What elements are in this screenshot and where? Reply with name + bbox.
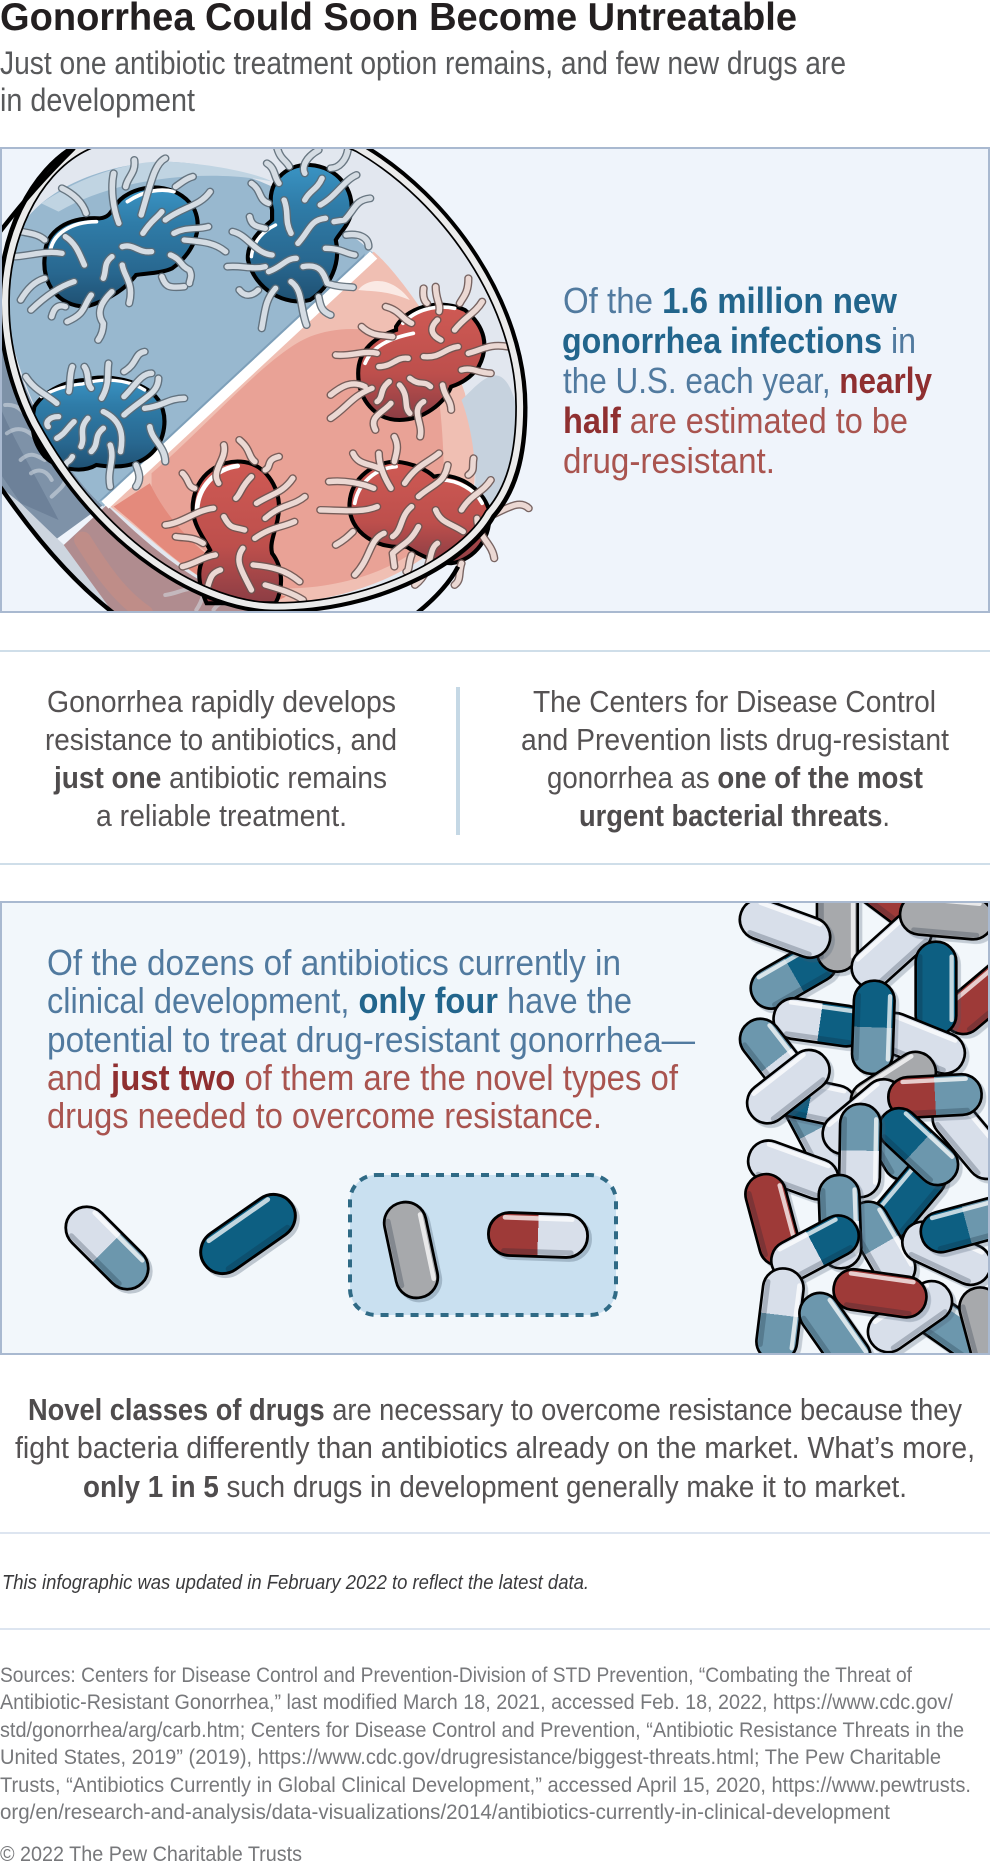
ghost bacteria under glass [5,405,234,610]
text block: novel classes: only 1 in 5 such drugs in development generally make it to market. [83,1469,907,1504]
update note: This infographic was updated in February 2022 to reflect the latest data. [2,1572,589,1594]
text block: CDC threat: and Prevention lists drug-resistant [521,722,949,757]
divider line [0,863,990,865]
sources [0,1664,971,1824]
sources: Sources: Centers for Disease Control and Prevention-Division of STD Prevention, “Combating the Threat of [0,1664,912,1687]
illustration: petri dish with bacteria [0,119,529,613]
bacterium: red, upper right [331,278,508,437]
panel: drug-resistant infections [0,119,989,613]
callout: infection statistics: drug-resistant. [563,440,775,481]
bacterium: red, bottom centre [165,440,305,603]
dish glass [5,123,520,607]
pill: red and white novel [488,1212,588,1258]
divider line [0,1532,990,1534]
subtitle: Just one antibiotic treatment option remains, and few new drugs are [0,45,846,81]
bacterium: blue, lower left [26,352,184,487]
agar: blue half [5,161,374,507]
illustration: pile of pills [738,903,988,1353]
right side tint [462,376,516,505]
text block: CDC threat: The Centers for Disease Control [533,684,936,719]
vertical divider [456,687,460,835]
callout: infection statistics: Of the 1.6 million new [563,280,898,321]
dish lower-left glass side [2,350,320,611]
sources: Antibiotic-Resistant Gonorrhea,” last modified March 18, 2021, accessed Feb. 18, 2022, https://www.cdc.gov/ [0,1691,953,1714]
callout: infection statistics: half are estimated to be [563,400,908,441]
callout: infection statistics [562,280,932,481]
text block: pipeline: and just two of them are the novel types of [47,1057,679,1098]
text block: pipeline: Of the dozens of antibiotics currently in [47,942,621,983]
sources: Trusts, “Antibiotics Currently in Global Clinical Development,” accessed April 15, 2020, https://www.pewtrusts. [0,1774,971,1797]
sources: United States, 2019” (2019), https://www.cdc.gov/drugresistance/biggest-threats.html; The Pew Charitable [0,1746,941,1769]
divider line [0,650,990,652]
callout: infection statistics: the U.S. each year, nearly [563,360,932,401]
text block: pipeline: drugs needed to overcome resistance. [47,1095,602,1136]
bacterium: blue, upper left [12,158,226,340]
text block: CDC threat: urgent bacterial threats. [579,798,890,833]
agar: red half [110,252,475,605]
panel: antibiotics in development [0,901,990,1355]
bacterium: blue, upper right [227,148,370,328]
divider line [0,1628,990,1630]
text block: resistance: resistance to antibiotics, and [45,722,397,757]
dish rim [0,119,525,613]
text block: resistance: just one antibiotic remains [53,760,387,795]
panel border [1,902,989,1354]
pill: gray novel [380,1198,442,1302]
highlight box: novel drugs [350,1175,616,1315]
text block: CDC threat [521,684,949,833]
pill: dark blue [192,1186,304,1282]
subtitle: in development [0,82,195,118]
text block: resistance: Gonorrhea rapidly develops [47,684,396,719]
sources: std/gonorrhea/arg/carb.htm; Centers for Disease Control and Prevention, “Antibiotic Resistance Threats in the [0,1719,964,1742]
text block: novel classes [15,1392,975,1504]
pill: white and teal [57,1198,157,1298]
panel border [1,148,989,612]
text block: pipeline: clinical development, only four have the [47,980,632,1021]
subtitle [0,45,846,118]
sources: org/en/research-and-analysis/data-visualizations/2014/antibiotics-currently-in-clinical-development [0,1801,890,1824]
text block: CDC threat: gonorrhea as one of the most [547,760,923,795]
callout: infection statistics: gonorrhea infections in [562,320,916,361]
text block: pipeline [47,942,695,1136]
agar divider [105,255,374,505]
text block: resistance [45,684,397,833]
text block: resistance: a reliable treatment. [96,798,347,833]
text block: pipeline: potential to treat drug-resistant gonorrhea— [47,1019,695,1060]
bacterium: red, lower right [320,437,529,585]
